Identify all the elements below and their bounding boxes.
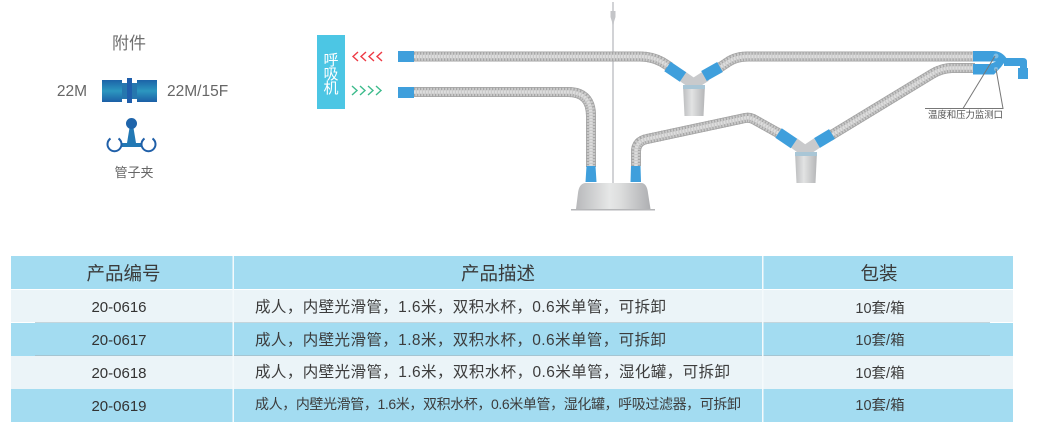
callout: monitoring port leader lines bbox=[925, 56, 1003, 108]
icon: blue connector bbox=[102, 78, 157, 103]
ventilator box: 机 bbox=[323, 80, 339, 97]
ventilator box: 呼 bbox=[323, 52, 339, 69]
tube: lower to humidifier bbox=[414, 92, 591, 167]
table header: 产品描述 bbox=[461, 263, 535, 284]
tube: upper right bbox=[716, 56, 975, 70]
row 20-0618: 成人，内壁光滑管，1.6米，双积水杯，0.6米单管，湿化罐，可拆卸 bbox=[255, 363, 730, 381]
tube: humidifier to second water trap bbox=[636, 118, 780, 166]
icon: tube clip bbox=[108, 118, 155, 151]
patient Y connector bbox=[973, 51, 1028, 79]
table header: 包装 bbox=[860, 263, 898, 284]
arrows: green incoming bbox=[352, 86, 381, 95]
row 20-0619: 20-0619 bbox=[91, 398, 147, 415]
row 20-0616: 成人，内壁光滑管，1.6米，双积水杯，0.6米单管，可拆卸 bbox=[255, 298, 666, 316]
callout label: temperature and pressure port: 温度和压力监测口 bbox=[928, 109, 1003, 121]
water trap 2 bbox=[778, 133, 832, 183]
row 20-0618: 10套/箱 bbox=[855, 365, 905, 382]
label: 22M/15F: 22M/15F bbox=[167, 83, 228, 100]
table header bbox=[86, 263, 898, 284]
row 20-0616: 20-0616 bbox=[91, 299, 147, 316]
table bbox=[11, 256, 1013, 422]
vertical hanger rod bbox=[610, 2, 616, 184]
table backgrounds bbox=[11, 256, 1013, 422]
ventilator box: 吸 bbox=[323, 66, 339, 83]
caption: tube clip: 管子夹 bbox=[114, 165, 154, 180]
water trap 1 bbox=[668, 66, 720, 116]
row 20-0617: 成人，内壁光滑管，1.8米，双积水杯，0.6米单管，可拆卸 bbox=[255, 331, 666, 349]
row 20-0618: 20-0618 bbox=[91, 365, 147, 382]
label: 22M: 22M bbox=[57, 83, 87, 100]
row 20-0619 bbox=[91, 396, 905, 415]
table header: 产品编号 bbox=[86, 263, 161, 284]
row 20-0616: 10套/箱 bbox=[855, 300, 905, 317]
row 20-0618 bbox=[91, 363, 905, 382]
blue cuffs: ventilator ends bbox=[398, 51, 414, 98]
arrows: red outgoing bbox=[353, 52, 382, 61]
row 20-0617: 20-0617 bbox=[91, 332, 147, 349]
humidifier base bbox=[571, 166, 655, 210]
row 20-0617: 10套/箱 bbox=[855, 332, 905, 349]
tube: second water trap to patient bbox=[830, 68, 975, 136]
ventilator box bbox=[317, 35, 345, 109]
tube: upper inspiratory left bbox=[414, 56, 670, 67]
row 20-0619: 成人，内壁光滑管，1.6米，双积水杯，0.6米单管，湿化罐，呼吸过滤器，可拆卸 bbox=[255, 396, 741, 412]
row 20-0616 bbox=[91, 298, 905, 317]
heading: accessories: 附件 bbox=[112, 34, 146, 53]
row 20-0617 bbox=[91, 331, 905, 349]
row 20-0619: 10套/箱 bbox=[855, 397, 905, 414]
